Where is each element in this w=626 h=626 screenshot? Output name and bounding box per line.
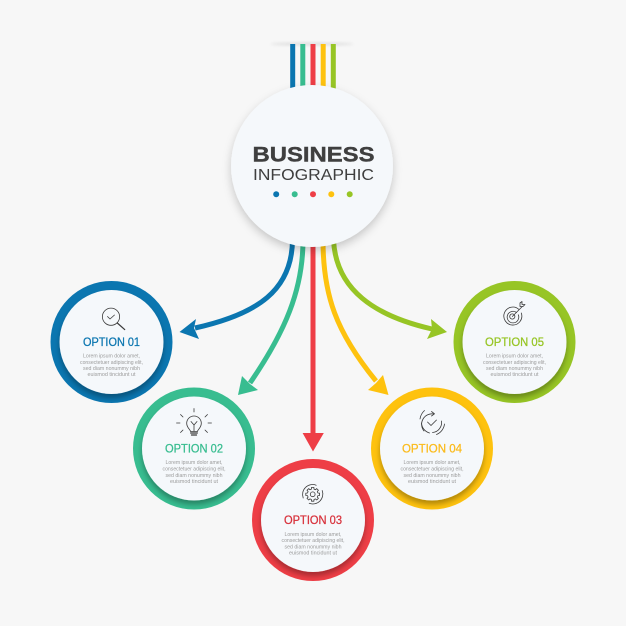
option 03 title: OPTION 03 <box>284 515 342 527</box>
option 02 text: Lorem ipsum dolor amet, <box>166 460 223 466</box>
main circle: business infographic <box>231 85 393 247</box>
option 02 text: consectetuer adipiscing elit, <box>162 466 226 472</box>
panel: option 01 <box>50 281 172 403</box>
option 02 text: sed diam nonummy nibh <box>166 473 222 479</box>
icon: clock check <box>420 410 444 434</box>
option 02 title: OPTION 02 <box>165 444 223 456</box>
option 03 text: consectetuer adipiscing elit, <box>282 538 345 544</box>
option 05 text <box>483 354 546 378</box>
arrow: to option 01 <box>180 240 292 339</box>
option 03 text <box>282 532 345 556</box>
arrow: to option 04 <box>323 240 388 395</box>
option 01 text: Lorem ipsum dolor amet, <box>83 354 140 360</box>
option 03 text: euismod tincidunt ut <box>289 550 337 556</box>
option 03 text: Lorem ipsum dolor amet, <box>284 532 342 538</box>
icon: gear with arrows <box>303 485 323 504</box>
option 05 text: Lorem ipsum dolor amet, <box>486 354 543 360</box>
panel: option 04 <box>371 388 493 510</box>
option 05 text: sed diam nonummy nibh <box>486 366 543 372</box>
coloured feed lines <box>293 44 333 95</box>
option 05 title: OPTION 05 <box>485 337 544 349</box>
icon: target with arrow <box>504 302 525 325</box>
heading: BUSINESS <box>252 144 374 166</box>
option 01 title: OPTION 01 <box>83 337 140 349</box>
option 04 text: consectetuer adipiscing elit, <box>400 466 464 472</box>
option 03 text: sed diam nonummy nibh <box>284 544 342 550</box>
option 04 title: OPTION 04 <box>402 444 463 456</box>
panel: option 02 <box>133 388 255 510</box>
option 01 text: sed diam nonummy nibh <box>83 366 140 372</box>
arrow: to option 05 <box>334 240 447 339</box>
option 05 text: euismod tincidunt ut <box>490 372 539 378</box>
option 01 text: consectetuer adipiscing elit, <box>80 360 143 366</box>
panel: option 03 <box>252 459 374 581</box>
option 04 text: Lorem ipsum dolor amet, <box>404 460 461 466</box>
option 02 text <box>162 460 226 485</box>
subheading: INFOGRAPHIC <box>253 167 374 184</box>
option 01 text <box>80 354 143 378</box>
colour dots <box>273 191 353 197</box>
option 04 text <box>400 460 464 485</box>
top shadow bar <box>270 43 354 45</box>
panel: option 05 <box>454 281 576 403</box>
option 05 text: consectetuer adipiscing elit, <box>483 360 546 366</box>
icon: light bulb <box>176 408 212 435</box>
option 02 text: euismod tincidunt ut <box>170 479 218 485</box>
arrow: to option 02 <box>238 240 303 395</box>
icon: magnifier <box>102 308 125 330</box>
arrow: to option 03 <box>303 240 324 452</box>
option 04 text: sed diam nonummy nibh <box>404 473 460 479</box>
option 01 text: euismod tincidunt ut <box>88 372 136 378</box>
option 04 text: euismod tincidunt ut <box>408 479 456 485</box>
